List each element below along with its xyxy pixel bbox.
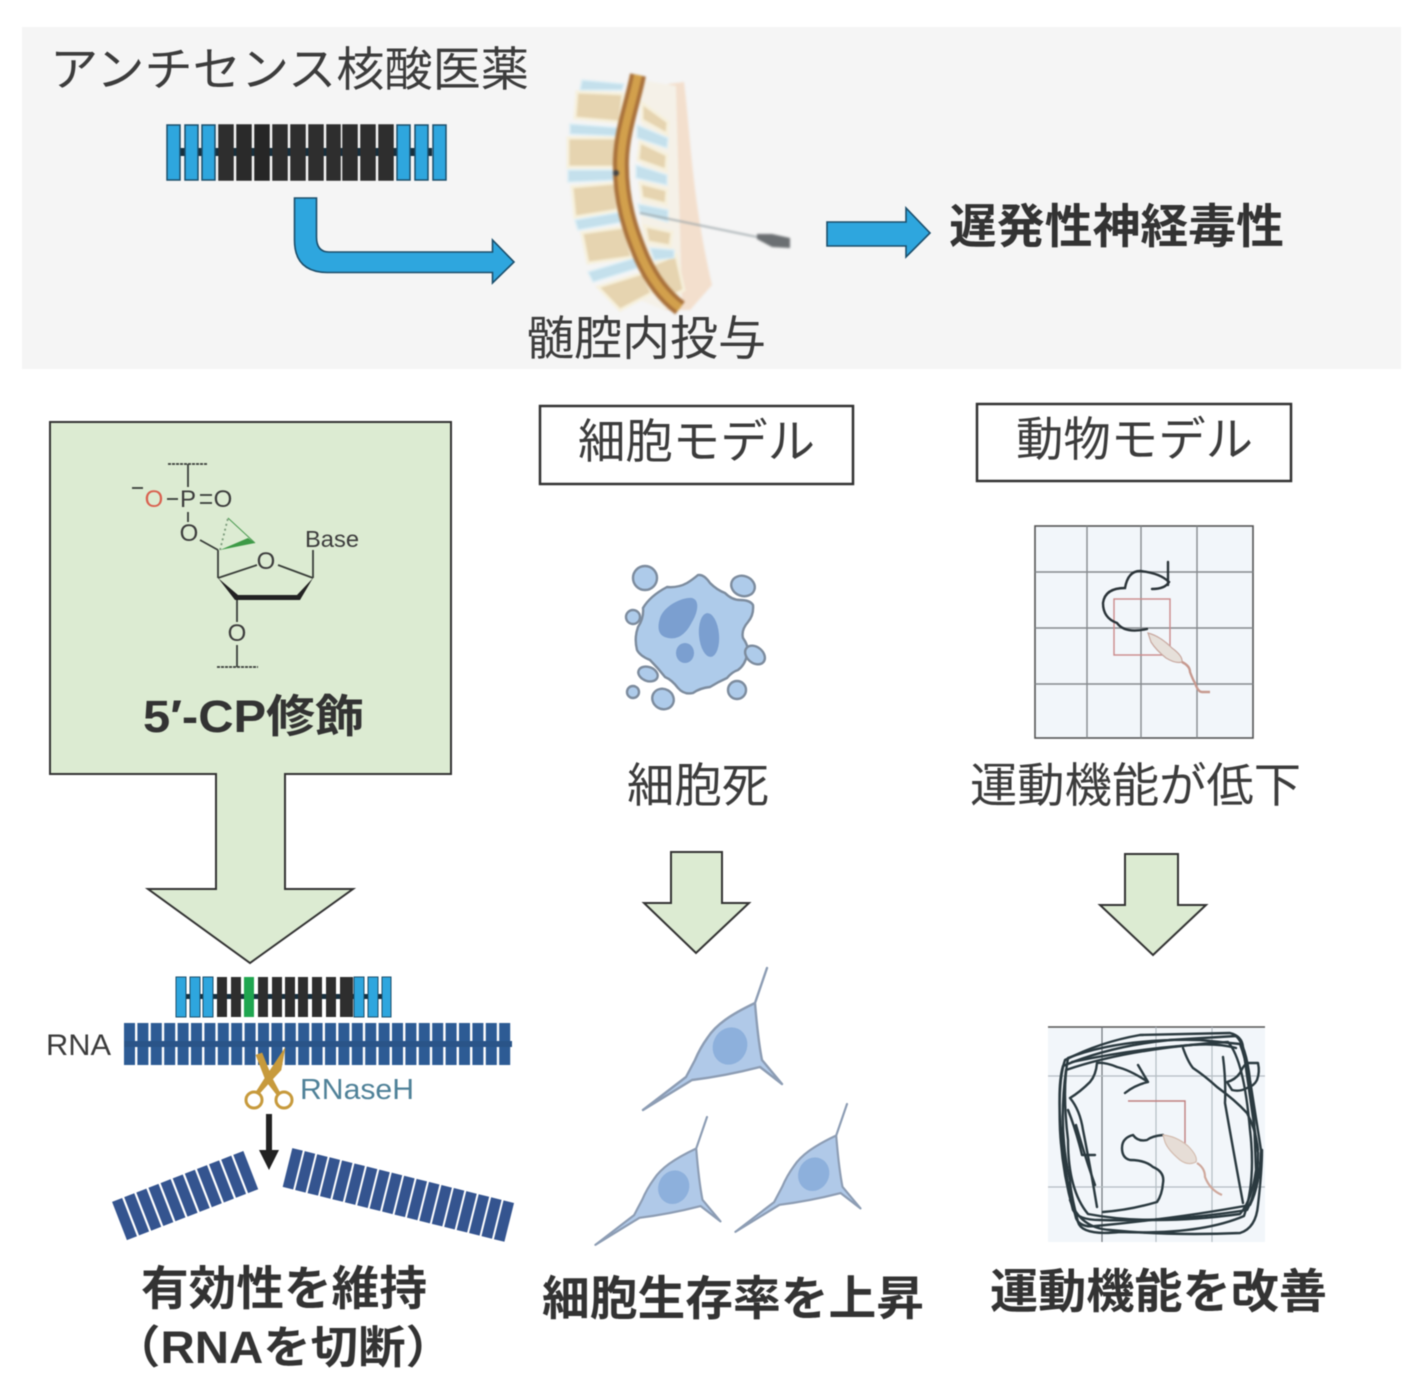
title: アンチセンス核酸医薬 (50, 43, 529, 96)
icon: dying cell (626, 566, 769, 713)
icon: right RNA fragment (288, 1168, 510, 1223)
label: RNaseH: RNaseH (300, 1074, 414, 1106)
label: improved motor function: 運動機能を改善 (990, 1265, 1327, 1318)
label: motor function decline: 運動機能が低下 (970, 759, 1301, 812)
arrow: cleavage (259, 1114, 279, 1170)
panel: top delivery panel (22, 27, 1401, 369)
icon: antisense oligonucleotide strand (167, 125, 446, 180)
box: animal model (977, 404, 1291, 481)
chemical structure: O (228, 620, 246, 647)
arrow: cell model down (644, 852, 749, 953)
box: animal model: 動物モデル (1016, 413, 1253, 466)
label: RNA: RNA (46, 1029, 111, 1062)
label: intrathecal administration: 髄腔内投与 (526, 312, 766, 365)
chemical structure: O (257, 548, 275, 575)
chemical structure: O (145, 486, 163, 513)
heading: delayed neurotoxicity: 遅発性神経毒性 (949, 200, 1284, 253)
icon: modified oligonucleotide strand (176, 977, 391, 1017)
label: cuts RNA: （RNAを切断） (113, 1322, 453, 1373)
chemical structure: O (214, 486, 232, 513)
chart: open field before treatment (1035, 526, 1253, 738)
icon: RNA strand (124, 1041, 512, 1047)
icon: left RNA fragment (120, 1169, 253, 1221)
arrow: bent arrow to spine (294, 198, 514, 283)
icon: spine with intrathecal needle (568, 75, 790, 310)
label: maintains efficacy: 有効性を維持 (141, 1262, 427, 1315)
label: 5'-CP modification: 5′-CP修飾 (143, 691, 364, 742)
icon: healthy neuron lower left (595, 1117, 720, 1245)
icon: healthy neuron lower right (735, 1104, 860, 1232)
chemical structure: Base (305, 526, 359, 552)
chart: open field after treatment (1048, 1027, 1265, 1242)
arrow: spine to neurotoxicity (827, 208, 930, 257)
icon: scissors (246, 1048, 292, 1108)
box: cell model (540, 406, 853, 484)
arrow: animal model down (1100, 854, 1206, 955)
diagram: RNA cleavage by RNaseH (46, 977, 512, 1223)
box: cell model: 細胞モデル (578, 415, 815, 468)
panel: 5'-CP modification arrow (50, 422, 451, 963)
label: increased cell survival: 細胞生存率を上昇 (542, 1272, 924, 1325)
label: cell death: 細胞死 (627, 759, 769, 812)
icon: healthy neuron top (643, 968, 782, 1110)
chemical structure (132, 464, 359, 667)
chemical structure: P (180, 486, 196, 513)
chemical structure: O (180, 520, 198, 547)
